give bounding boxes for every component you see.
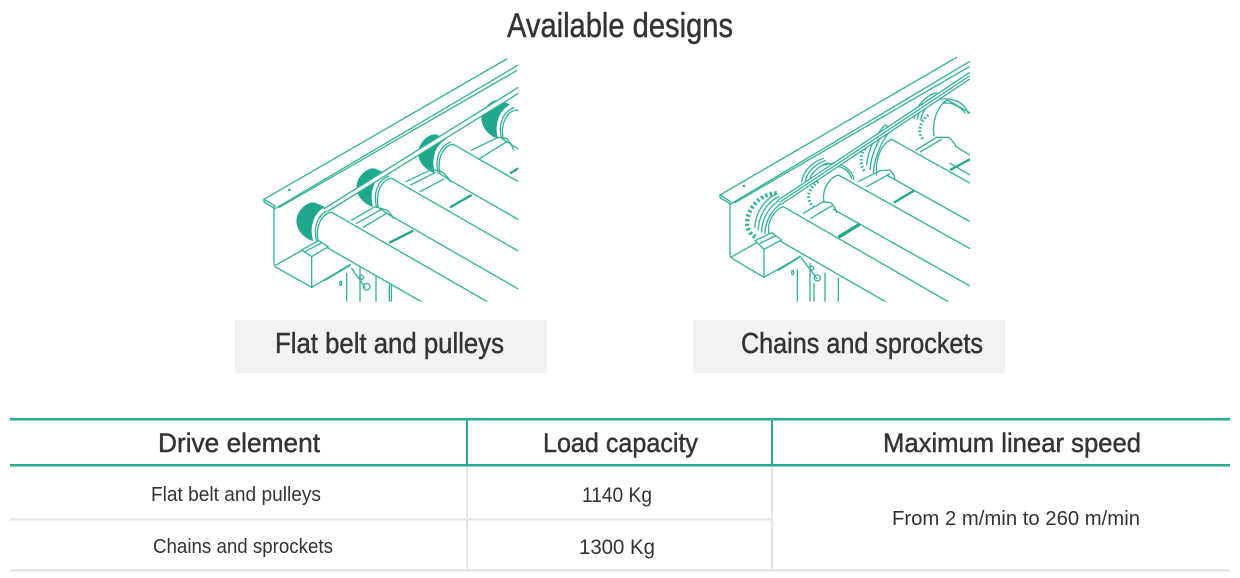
deck bracket 3 xyxy=(406,169,472,207)
front bracket xyxy=(302,241,328,287)
row: flat belt and pulleys xyxy=(151,484,652,507)
table header: Maximum linear speed xyxy=(883,428,1141,458)
merged cell: maximum linear speed: From 2 m/min to 260 m/min xyxy=(892,508,1140,530)
chain xyxy=(778,73,969,204)
deck bracket 2 xyxy=(803,202,860,237)
deck bracket 2 xyxy=(352,207,413,243)
row: chains and sprockets: Chains and sprockets xyxy=(153,536,333,558)
label: chains and sprockets xyxy=(693,320,1005,373)
illustration: flat belt and pulleys xyxy=(263,58,518,302)
table xyxy=(10,418,1230,572)
illustration: chains and sprockets xyxy=(719,56,970,302)
row: flat belt and pulleys: Flat belt and pulleys xyxy=(151,484,321,506)
roller 3 with pulley xyxy=(418,134,518,220)
side frame xyxy=(264,59,518,302)
roller 4 with pulley xyxy=(481,100,518,150)
table header xyxy=(158,428,1141,458)
label: flat belt and pulleys xyxy=(235,320,547,373)
flat belt xyxy=(324,87,518,211)
row: flat belt and pulleys: 1140 Kg xyxy=(582,484,652,507)
roller 3 with sprocket xyxy=(860,124,970,222)
table grid xyxy=(10,418,1230,572)
roller 2 with sprocket xyxy=(801,158,970,287)
deck bracket 4 xyxy=(472,137,518,173)
front bracket xyxy=(755,233,782,277)
row: chains and sprockets: 1300 Kg xyxy=(579,536,655,559)
label: flat belt and pulleys: Flat belt and pulleys xyxy=(275,328,504,360)
side frame xyxy=(720,57,969,302)
deck bracket 3 xyxy=(858,170,914,203)
table header: Load capacity xyxy=(543,428,698,458)
roller 2 with pulley xyxy=(356,168,518,290)
label: chains and sprockets: Chains and sprockets xyxy=(741,328,983,360)
roller 1 with pulley xyxy=(296,202,489,302)
title: Available designs xyxy=(507,7,733,45)
roller 1 with sprocket xyxy=(744,191,950,302)
roller 4 with sprocket xyxy=(913,92,970,140)
deck bracket 4 xyxy=(916,137,970,175)
table header: Drive element xyxy=(158,428,320,458)
row: chains and sprockets xyxy=(153,536,655,559)
